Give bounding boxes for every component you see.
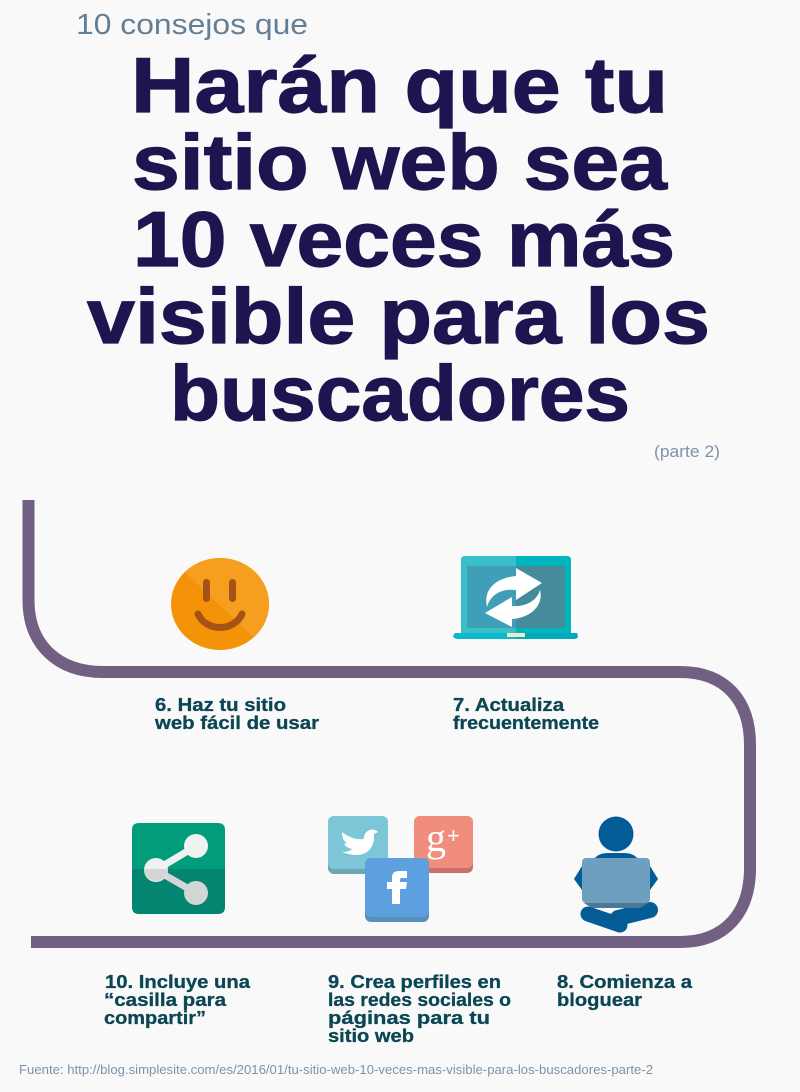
step 10 label: “casilla para: [104, 989, 227, 1010]
step 9 label: sitio web: [328, 1025, 414, 1046]
winding path line: [28, 500, 750, 942]
part label: (parte 2): [654, 442, 720, 461]
step 9 label: [328, 971, 511, 1046]
step 9 label: las redes sociales o: [328, 989, 511, 1010]
icon: google plus tile: +: [447, 823, 460, 848]
title: 10 veces más: [133, 195, 675, 283]
source: Fuente: http://blog.simplesite.com/es/2016/01/tu-sitio-web-10-veces-mas-visible-para-los-buscadores-parte-2: [19, 1063, 653, 1077]
icon: facebook tile: [365, 858, 429, 922]
title: sitio web sea: [132, 118, 668, 206]
icon: google plus tile: g: [426, 815, 446, 860]
step 8 label: [557, 971, 693, 1010]
title: visible para los: [87, 272, 710, 360]
step 6 label: 6. Haz tu sitio: [155, 694, 286, 715]
icon: twitter tile: [328, 816, 388, 874]
step 6 label: [154, 694, 319, 733]
subtitle: 10 consejos que: [76, 9, 308, 41]
step 7 label: [453, 694, 599, 733]
title: [87, 41, 710, 437]
step 7 label: frecuentemente: [453, 712, 599, 733]
step 7 label: 7. Actualiza: [453, 694, 565, 715]
icon: google plus tile: [414, 815, 473, 873]
step 9 label: 9. Crea perfiles en: [328, 971, 501, 992]
step 10 label: [104, 971, 251, 1028]
title: Harán que tu: [131, 41, 668, 129]
icon: smiley: [171, 558, 269, 650]
step 6 label: web fácil de usar: [154, 712, 319, 733]
icon: laptop with refresh arrows: [453, 556, 578, 639]
step 10 label: compartir”: [104, 1007, 206, 1028]
icon: person blogging on laptop: [574, 816, 658, 925]
step 8 label: 8. Comienza a: [557, 971, 693, 992]
title: buscadores: [170, 349, 630, 437]
step 9 label: páginas para tu: [328, 1007, 490, 1028]
step 8 label: bloguear: [557, 989, 642, 1010]
step 10 label: 10. Incluye una: [105, 971, 251, 992]
icon: share: [132, 823, 225, 914]
